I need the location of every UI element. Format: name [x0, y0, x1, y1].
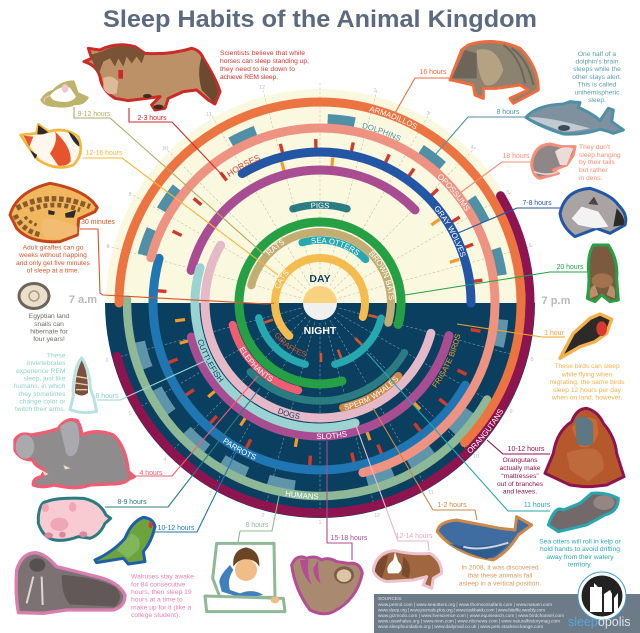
connector: giraffes — [80, 229, 274, 304]
giraffe text: of sleep at a time. — [27, 268, 80, 274]
title: Sleep Habits of the Animal Kingdom — [103, 6, 537, 33]
frigate bird text: sleep 12 hours per day — [553, 387, 622, 394]
horses sleep marks — [156, 139, 482, 466]
ring: parrots: PARROTS — [222, 438, 256, 460]
ring: cats: CATS — [275, 270, 288, 288]
hour labels: 1 hour — [544, 330, 564, 337]
hour labels: 9-12 hours — [78, 111, 111, 118]
horse text — [220, 50, 309, 81]
connector: rats — [74, 107, 267, 257]
opossum text: but rather — [579, 167, 608, 174]
giraffe text: Adult giraffes can go — [23, 244, 84, 252]
hour labels: 12-16 hours — [86, 150, 123, 157]
dolphin text: sleeps while the — [573, 66, 621, 73]
hour labels: 15-18 hours — [331, 535, 368, 542]
ring: pigs: PIGS — [311, 202, 329, 208]
hour numbers: 8 — [530, 357, 534, 363]
dolphin text: unihemispheric — [575, 90, 620, 96]
dolphins sleep blocks — [62, 45, 578, 561]
hour labels: 7-8 hours — [522, 200, 552, 207]
hour numbers: 12 — [259, 85, 265, 91]
dolphin text: One half of a — [578, 51, 616, 58]
walrus text: college student). — [131, 612, 180, 619]
icon: cuttlefish — [70, 358, 97, 413]
cuttlefish text — [14, 352, 66, 413]
connector: pigs — [105, 388, 260, 507]
icon: dolphin — [526, 102, 623, 134]
horse text: Scientists believe that while — [220, 50, 305, 57]
sources panel: SOURCES: — [378, 596, 402, 601]
snail text: Egyptian land — [29, 313, 70, 320]
connector: opossums — [460, 162, 531, 193]
connector: gray wolves — [458, 208, 560, 233]
walrus text: hours, then sleep 19 — [131, 589, 192, 596]
ring: gray wolves: GRAY WOLVES — [435, 206, 466, 257]
icon: horse — [84, 45, 220, 110]
frigate birds sleep marks — [175, 158, 459, 447]
sperm whale text: that these animals fall — [468, 572, 533, 580]
hour numbers: 2 — [261, 513, 265, 519]
hour numbers: 5 — [128, 411, 132, 417]
day label: DAY — [309, 273, 331, 285]
giraffe text: and only get five minutes — [16, 260, 91, 267]
cuttlefish text: experience REM — [16, 368, 66, 375]
hour numbers: 8 — [106, 244, 110, 250]
sea otter text: Sea otters will roll in kelp or — [539, 538, 621, 546]
logo: sleepopolis — [568, 572, 631, 629]
7 p.m label: 7 p.m — [542, 295, 571, 307]
sources panel: www.sleepfoundation.org | www.dailymail.co.uk | www.pets.stackexchange.com — [378, 624, 543, 629]
hour labels: 8 hours — [96, 393, 119, 400]
hour numbers: 1 — [318, 520, 322, 526]
walrus text: Walruses stay awake — [131, 574, 194, 580]
sources panel: www.petmd.com | www.seaotters.org | www.thomsonsafaris.com | www.natuen.com — [378, 602, 552, 607]
snail text: snails can — [34, 321, 64, 328]
snail text: hibernate for — [30, 328, 69, 336]
ring: dogs: DOGS — [278, 408, 300, 419]
hour labels: 10-12 hours — [508, 446, 545, 453]
hour labels: 10-12 hours — [158, 525, 195, 532]
hour labels: 11 hours — [524, 502, 551, 509]
hour numbers: 11 — [206, 112, 212, 118]
hour numbers: 10 — [162, 146, 168, 152]
giraffe text: weeks without napping — [18, 252, 87, 259]
connector: elephants — [135, 376, 258, 476]
sea otter text: territory. — [568, 562, 592, 568]
hour numbers: 11 — [428, 490, 434, 496]
horse text: they need to lie down to — [220, 66, 295, 73]
sources panel: www.sleep.org | www.journals.plos.org | www.iaskbaidu.com | www.bitefile.weebly.com — [378, 608, 545, 612]
orangutan text: and leaves. — [503, 488, 537, 496]
frigate bird text: while flying when — [561, 372, 613, 378]
sea otter text: away from their watery — [546, 554, 614, 561]
ring: rats and brown bats label — [247, 228, 395, 327]
hour labels: 4 hours — [140, 470, 163, 477]
sea otter text — [539, 538, 621, 568]
icon: human sleeping — [205, 543, 285, 612]
label: giraffes: GIRAFFES — [275, 333, 306, 357]
dolphin text — [572, 51, 622, 104]
snail text — [29, 313, 70, 343]
hour labels: 8 hours — [497, 109, 520, 116]
dolphin text: sleep. — [588, 97, 606, 104]
horse text: horses can sleep standing up, — [220, 58, 309, 65]
7 a.m label: 7 a.m — [69, 294, 97, 306]
sources panel: www.usawhales.org | www.mnn.com | www.nbcnews.com | www.naturalhistorymag.com — [378, 618, 560, 624]
ring: sea otters: SEA OTTERS — [311, 238, 360, 256]
hour numbers: 5 — [506, 190, 510, 196]
ring: brown bats — [220, 203, 420, 403]
opossum text: in dens. — [579, 175, 603, 182]
ring: dogs — [200, 240, 436, 422]
orangutan text: out of branches — [497, 481, 544, 488]
hour labels: 1-2 hours — [437, 502, 467, 509]
icon: brown bat — [587, 245, 618, 302]
icon: sloth — [292, 557, 362, 614]
sperm whale text: In 2008, it was discovered — [461, 564, 539, 572]
cuttlefish text: change color or — [19, 398, 66, 406]
ring: armadillos: ARMADILLOS — [368, 106, 418, 129]
dolphin text: other stays alert. — [572, 74, 622, 81]
walrus text: for 84 consecutive — [131, 582, 186, 588]
ring: cuttlefish: CUTTLEFISH — [198, 340, 224, 382]
hour numbers: 4 — [163, 457, 167, 463]
icon: elephant — [15, 420, 134, 488]
hour labels: 8-9 hours — [117, 499, 147, 506]
night label: NIGHT — [304, 325, 337, 337]
orangutan text: actually make — [500, 465, 541, 472]
snail text: four years! — [33, 336, 65, 343]
connector: cuttlefish — [97, 360, 207, 400]
cuttlefish text: invertebrates — [27, 360, 66, 367]
icon: frigate bird — [560, 314, 612, 358]
hour numbers: 6 — [528, 243, 532, 249]
sources panel — [374, 594, 640, 633]
ring: rats and brown bats label: RATS — [266, 240, 284, 256]
dolphin text: This is called — [578, 82, 617, 88]
icon: sperm whale — [437, 517, 532, 560]
icon: walrus — [16, 553, 125, 613]
orangutan text: Orangutans — [503, 457, 538, 464]
ring: sloths — [186, 166, 454, 440]
connector: sea otters — [367, 353, 550, 511]
connector: brown bats — [405, 272, 587, 295]
ring: pigs — [246, 201, 408, 405]
frigate bird text: when on land, however. — [551, 394, 622, 402]
icon: armadillo — [450, 42, 538, 103]
hour labels: 18 hours — [503, 153, 530, 160]
hour tick lines — [106, 81, 534, 517]
opossum text: by their tails — [579, 159, 615, 166]
hour labels: 2-3 hours — [137, 115, 167, 122]
hour labels: 12-14 hours — [396, 533, 433, 540]
night half disc — [105, 303, 535, 518]
ring: humans: HUMANS — [286, 490, 318, 499]
hour numbers: 3 — [208, 491, 212, 497]
hour labels: 30 minutes — [81, 219, 115, 226]
hour numbers: 6 — [105, 358, 109, 364]
hour numbers: 9 — [128, 192, 132, 198]
sperm whale text — [459, 564, 541, 588]
hour numbers — [105, 85, 534, 526]
hour labels: 20 hours — [557, 264, 584, 271]
horse text: achieve REM sleep. — [220, 74, 278, 81]
icon: pig — [38, 498, 111, 540]
logo: sleepopolis: sleepopolis — [568, 615, 631, 629]
hour numbers: 10 — [473, 454, 479, 460]
ring: cuttlefish — [190, 263, 360, 432]
frigate bird text: These birds can sleep — [554, 363, 620, 370]
ring: sloths: SLOTHS — [316, 431, 347, 440]
hour labels — [78, 69, 584, 542]
opossum text — [579, 144, 621, 182]
connector: frigate birds — [457, 324, 565, 337]
walrus text — [131, 574, 194, 619]
connector: sperm whales — [373, 408, 477, 520]
connector: sloths — [327, 441, 352, 560]
hour numbers: 2 — [373, 88, 377, 94]
connector: dogs — [355, 423, 429, 551]
ring: opossums: OPOSSUMS — [438, 174, 470, 211]
connector: horses — [129, 108, 224, 177]
hour numbers: 4 — [470, 145, 474, 151]
hour labels: 8 hours — [246, 522, 269, 529]
connector: cats — [83, 158, 278, 275]
cuttlefish text: These — [47, 352, 66, 360]
moon half — [303, 303, 337, 320]
label: dolphins: DOLPHINS — [362, 122, 401, 141]
icon: giraffe — [10, 183, 97, 242]
label: frigate birds: FRIGATE BIRDS — [432, 334, 460, 388]
ring: rats and brown bats label: BROWN BATS — [368, 250, 394, 300]
giraffe text — [16, 244, 91, 274]
cuttlefish text: twitch their arms. — [15, 406, 66, 413]
label: horses: HORSES — [226, 155, 260, 177]
icon: snail — [19, 284, 49, 308]
opossum text: sleep hanging — [579, 152, 621, 159]
ring: cats — [271, 254, 370, 340]
icon: orangutan — [545, 408, 624, 487]
hour numbers: 3 — [426, 111, 430, 117]
icon: cat — [21, 124, 81, 167]
icon: dog — [373, 551, 442, 588]
dolphin text: dolphin's brain — [576, 58, 619, 66]
connector: parrots — [153, 450, 237, 532]
ring: elephants — [228, 320, 302, 394]
cuttlefish text: sleep, just like — [23, 376, 66, 382]
sources panel: www.gizmodo.com | www.livescience.com | www.equisearch.com | www.birdchannel.com — [378, 613, 564, 618]
frigate bird text — [549, 363, 625, 402]
connector: humans — [238, 496, 279, 542]
hour numbers: 12 — [374, 513, 380, 519]
walrus text: hours at a time to — [131, 596, 183, 604]
frigate bird text: migrating; the same birds — [549, 379, 625, 386]
hour labels: 16 hours — [420, 69, 447, 76]
sperm whale text: asleep in a vertical position. — [459, 580, 541, 588]
ring: elephants: ELEPHANTS — [240, 346, 273, 382]
walrus text: make up for it (like a — [131, 604, 191, 612]
ring: sperm whales: SPERM WHALES — [344, 376, 398, 410]
connector: orangutans — [487, 440, 550, 454]
connector: armadillos — [395, 78, 449, 113]
connector: dolphins — [435, 117, 527, 155]
opossum text: They don't — [579, 144, 610, 151]
hour numbers: 9 — [509, 409, 513, 415]
giraffes sleep marks — [264, 315, 377, 362]
cuttlefish text: humans, in which — [14, 383, 66, 390]
orangutan text — [497, 457, 544, 496]
icon: parrot — [95, 517, 155, 564]
day half disc — [106, 89, 534, 303]
icon: mouse — [42, 82, 87, 106]
cuttlefish text: they sometimes — [19, 391, 66, 398]
ring: sea otters — [255, 236, 385, 368]
icon: opossum — [532, 144, 575, 178]
orangutan text: “mattresses” — [501, 473, 539, 480]
sea otter text: hold hands to avoid drifting — [540, 546, 620, 553]
icon: sea otter — [548, 493, 618, 532]
ring: orangutans: ORANGUTANS — [468, 409, 503, 453]
sun half — [303, 286, 337, 303]
icon: gray wolf — [560, 188, 626, 237]
